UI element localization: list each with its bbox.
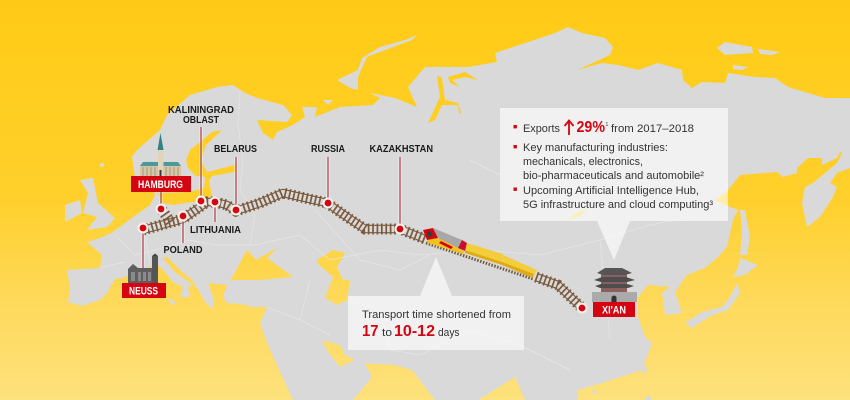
bullet: key industries: bio-pharmaceuticals and automobile² [523, 170, 704, 182]
bullet: AI hub: Upcoming Artificial Intelligence Hub, [523, 185, 699, 197]
bullet: key industries: Key manufacturing industries: [523, 142, 668, 154]
panel: transport time [348, 257, 524, 350]
connector lines and stops [138, 127, 588, 314]
country labels: POLAND [164, 245, 202, 256]
label: Xi'an: XI'AN [602, 304, 626, 316]
label: Xi'an [593, 302, 635, 317]
panel: transport time: to [382, 327, 392, 339]
country labels: RUSSIA [311, 144, 345, 155]
label: Hamburg [131, 176, 191, 192]
bullet: key industries: mechanicals, electronics, [523, 156, 643, 168]
map: inland seas [158, 72, 588, 305]
panel: Xi'an facts [500, 108, 728, 260]
bullet: key industries [514, 142, 704, 182]
panel: transport time: days [438, 327, 460, 339]
country labels: KAZAKHSTAN [370, 144, 433, 155]
panel: transport time: Transport time shortened from [362, 309, 511, 321]
bullet: exports [514, 119, 694, 136]
icon: Hamburg town hall [140, 133, 181, 176]
icon: Neuss church [128, 254, 158, 283]
bullet: exports: 1 [606, 122, 608, 128]
map: country borders [100, 92, 700, 370]
bullet: exports: Exports [523, 123, 560, 135]
country labels: KALININGRAD [168, 105, 234, 116]
train [423, 228, 537, 278]
label: Neuss [122, 283, 166, 298]
country labels: OBLAST [183, 115, 219, 126]
map: islands [65, 35, 780, 400]
bullet: exports: from 2017–2018 [611, 123, 694, 135]
panel: transport time: 10-12 [394, 323, 435, 340]
bullet: AI hub [514, 185, 713, 211]
label: Hamburg: HAMBURG [138, 179, 183, 191]
country labels [164, 105, 433, 256]
railway track [143, 193, 582, 308]
label: Neuss: NEUSS [129, 286, 158, 298]
bullet: AI hub: 5G infrastructure and cloud computing³ [523, 199, 713, 211]
country labels: BELARUS [214, 144, 257, 155]
bullet: exports: 29% [576, 119, 605, 136]
country labels: LITHUANIA [190, 225, 241, 236]
icon: Xi'an gate tower [592, 268, 637, 302]
panel: transport time: 17 [362, 323, 378, 340]
